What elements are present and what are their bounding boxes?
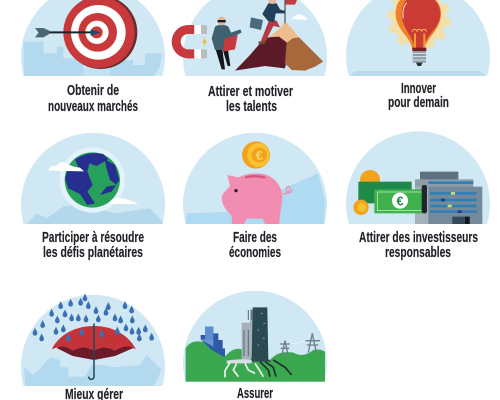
icon: piggy bank and euro coin: € [256, 148, 264, 163]
dome background [346, 131, 490, 224]
dome background [183, 0, 327, 76]
dome background [21, 0, 165, 76]
panel: obtenir de nouveaux marchés [21, 0, 165, 115]
label: les talents [226, 99, 277, 115]
dome background [183, 291, 327, 382]
label: les défis planétaires [43, 245, 143, 261]
label: Innover [401, 81, 436, 97]
label [229, 230, 281, 261]
dome background [21, 295, 165, 386]
label [388, 81, 449, 111]
label: Attirer et motiver [208, 84, 293, 100]
dome background [183, 133, 327, 224]
illustration: magnet, recruiter and mountain climber [172, 0, 323, 71]
icon: light bulb [350, 0, 486, 76]
illustration: green hills, towers, roots and power pylons [186, 307, 325, 382]
icon: banknotes, coins and office building: € [396, 194, 404, 208]
label: responsables [385, 245, 451, 261]
panel: innover pour demain [346, 0, 490, 111]
label [42, 230, 144, 261]
icon: target and arrow [23, 0, 162, 76]
label: nouveaux marchés [48, 99, 138, 115]
label [359, 230, 478, 261]
label: Obtenir de [67, 83, 119, 99]
dome background [21, 133, 165, 224]
label [48, 83, 138, 115]
panel: assurer [183, 291, 327, 400]
panel: mieux gérer [21, 293, 165, 400]
label: Faire des [233, 230, 277, 246]
dome background [346, 0, 490, 76]
label: économies [229, 245, 281, 261]
icon: piggy bank and euro coin [186, 141, 325, 224]
label: pour demain [388, 95, 449, 111]
panel: faire des économies [183, 133, 327, 261]
panel: attirer des investisseurs responsables [346, 131, 490, 261]
panel: participer à résoudre les défis planétaires [21, 133, 165, 261]
panel: attirer et motiver les talents [172, 0, 327, 115]
icon: earth with clouds [27, 147, 163, 224]
icon: umbrella under rain and skyline [24, 293, 162, 386]
label: Participer à résoudre [42, 230, 144, 246]
label [208, 84, 293, 115]
icon: banknotes, coins and office building [353, 170, 482, 224]
